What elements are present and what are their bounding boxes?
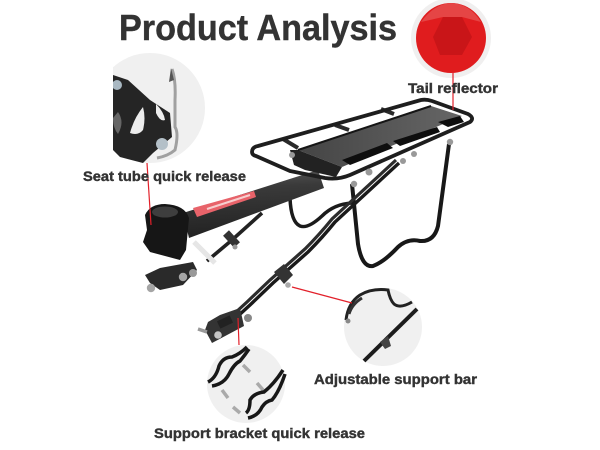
plate slots (342, 116, 464, 165)
rear stay (290, 198, 352, 227)
main beam (183, 170, 324, 238)
leader line (452, 72, 454, 110)
leader line (238, 318, 239, 345)
red sticker (193, 191, 256, 217)
seat tube collar (143, 204, 189, 260)
front stay (352, 144, 449, 266)
leader line (147, 163, 151, 225)
loose clamp (145, 242, 215, 292)
title: Product Analysis (119, 7, 397, 48)
thin rod (207, 213, 262, 261)
rack under bracket (290, 150, 342, 177)
support bracket quick release detail (207, 318, 285, 423)
rack plate (298, 106, 462, 167)
rear rack product (143, 100, 472, 343)
frame bolts (289, 139, 453, 187)
main support bar (235, 160, 399, 316)
tail reflector (411, 0, 491, 110)
leader line (292, 287, 352, 303)
label: seat tube quick release: Seat tube quick release (83, 168, 246, 184)
label: adjustable support bar: Adjustable support bar (314, 371, 478, 387)
rack rungs (283, 109, 394, 148)
lower clamp (198, 308, 252, 343)
label: support bracket quick release: Support bracket quick release (154, 425, 365, 441)
adjustable support bar detail (292, 287, 422, 366)
white rubber strap (194, 242, 215, 263)
label: tail reflector: Tail reflector (408, 80, 499, 96)
plate back edge (298, 106, 431, 150)
rack frame tube (252, 100, 472, 179)
seat tube quick release detail (113, 53, 205, 225)
adjuster clamp (274, 264, 293, 288)
